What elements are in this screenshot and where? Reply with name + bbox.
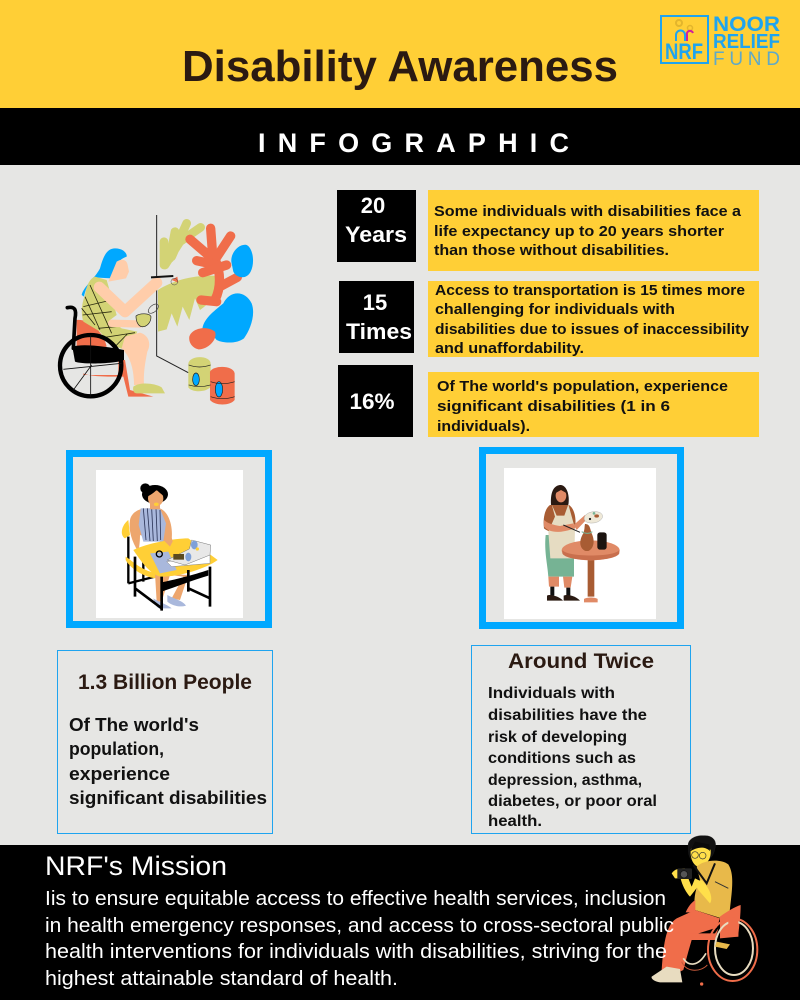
panel: 1.3 billion people: Of The world's: [69, 715, 199, 735]
logo: Noor Relief Fund: FUND: [713, 49, 780, 70]
panel: around twice: health.: [488, 813, 542, 830]
logo: Noor Relief Fund: [661, 13, 780, 70]
mission body: Iis to ensure equitable access to effective health services, inclusion: [45, 887, 666, 910]
panel: around twice: conditions such as: [488, 750, 636, 767]
stat: 20 years: 20: [361, 193, 385, 218]
logo: Noor Relief Fund: NOOR: [713, 13, 780, 36]
mission heading: NRF's Mission: [45, 851, 227, 881]
stat text: world population: individuals).: [437, 418, 530, 435]
stat: 16 percent: [338, 365, 413, 437]
panel: around twice: risk of developing: [488, 729, 627, 746]
stat text: world population: significant disabilities (1 in 6: [437, 398, 670, 415]
stat text: transportation: [428, 281, 759, 357]
stat text: life expectancy: [428, 190, 759, 271]
panel: around twice: depression, asthma,: [488, 772, 642, 789]
panel: around twice: Individuals with: [488, 685, 615, 702]
framed illustration: woman painting pottery: [482, 450, 680, 626]
stat: 15 times: Times: [346, 319, 412, 344]
stat text: world population: [428, 372, 759, 437]
panel: 1.3 billion people: population,: [69, 739, 164, 759]
panel: 1.3 billion people: significant disabilities: [69, 788, 267, 808]
stat text: life expectancy: life expectancy up to 20 years shorter: [434, 223, 724, 240]
panel: around twice: disabilities have the: [488, 707, 647, 724]
panel: 1.3 billion people: 1.3 Billion People: [78, 671, 252, 694]
stat text: transportation: disabilities due to issues of inaccessibility: [435, 321, 750, 338]
mission body: in health emergency responses, and access to cross-sectoral public: [45, 914, 674, 937]
subtitle band: INFOGRAPHIC: [258, 128, 569, 158]
panel: 1.3 billion people: experience: [69, 764, 170, 784]
stat: 20 years: Years: [345, 222, 407, 247]
stat text: transportation: and unaffordability.: [435, 340, 584, 357]
header band: [0, 0, 800, 108]
panel: around twice: [472, 646, 690, 834]
stat text: transportation: Access to transportation is 15 times more: [435, 282, 745, 299]
panel: around twice: diabetes, or poor oral: [488, 793, 657, 810]
panel: 1.3 billion people: [58, 650, 272, 834]
title: Disability Awareness: [182, 42, 618, 91]
mission body: highest attainable standard of health.: [45, 967, 398, 990]
mission body: [45, 887, 674, 990]
stat text: transportation: challenging for individuals with: [435, 301, 675, 318]
stat: 15 times: 15: [363, 290, 387, 315]
stat text: life expectancy: than those without disabilities.: [434, 242, 669, 259]
stat: 16 percent: 16%: [350, 389, 394, 414]
stat text: life expectancy: Some individuals with disabilities face a: [434, 203, 742, 220]
logo: Noor Relief Fund: NRF: [665, 39, 703, 64]
mission band: [0, 836, 800, 1000]
illustration: photographer in wheelchair: [652, 836, 757, 986]
framed illustration: woman at desk: [70, 454, 268, 624]
panel: around twice: Around Twice: [508, 650, 654, 673]
mission body: health interventions for individuals with disabilities, striving for the: [45, 940, 667, 963]
stat: 20 years: [337, 190, 416, 262]
stat text: world population: Of The world's population, experience: [437, 378, 728, 395]
illustration: woman in wheelchair painting a wall: [60, 215, 253, 404]
logo: Noor Relief Fund: RELIEF: [713, 31, 780, 53]
subtitle band: [0, 108, 800, 165]
stat: 15 times: [339, 281, 414, 353]
